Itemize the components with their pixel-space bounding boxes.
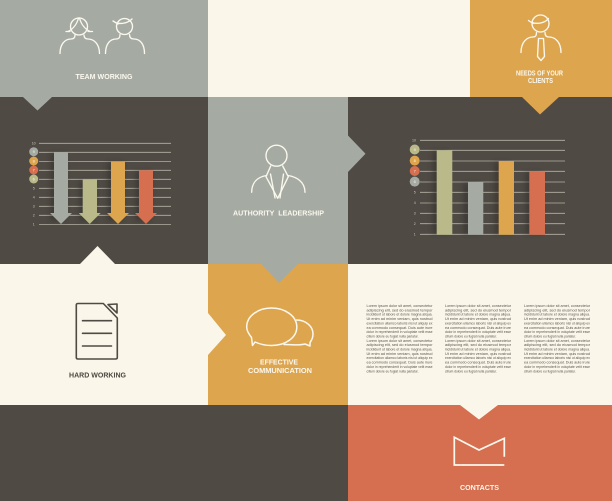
icon: document [76,304,117,359]
panel: right chart background [348,97,612,264]
bar chart: arrows: 3 [33,204,35,208]
arrow: clients pointer [522,97,559,114]
text block: column 3: Lorem ipsum dolor sit amet, consectetur [524,304,591,308]
bar chart: columns [410,138,565,236]
text block: column 1 [366,304,433,373]
text block: column 1: adipiscing elit, sed do eiusmod tempor [366,308,433,312]
panel: effective communication [208,264,348,405]
text block: column 3: dolor in reprehenderit in voluptate velit esse [524,365,590,369]
text block: column 2: cillum dolore eu fugiat nulla pariatur. [445,334,497,338]
text block: column 1: ea commodo consequat. Duis aute irure [366,361,432,365]
text block: column 2: adipiscing elit, sed do eiusmod tempor [445,308,512,312]
arrow: authority right pointer [348,136,366,172]
text block: column 2: adipiscing elit, sed do eiusmod tempor [445,343,512,347]
arrow: hard working up pointer [80,246,115,264]
text block: column 2: dolor in reprehenderit in voluptate velit esse [445,365,511,369]
text block: column 1: cillum dolore eu fugiat nulla pariatur. [366,334,418,338]
heading: needs of your clients [516,70,563,85]
text block: column 2: Ut enim ad minim veniam, quis nostrud [445,352,511,356]
heading: needs of your clients: NEEDS OF YOUR [516,70,563,78]
panel: authority leadership [208,97,348,264]
arrow: authority down pointer [261,264,298,283]
text block: column 1: exercitation ullamco laboris nisi ut aliquip ex [366,321,433,325]
bar chart: columns: 10 [412,138,416,142]
text block: column 1: adipiscing elit, sed do eiusmod tempor [366,343,433,347]
text block: column 3: adipiscing elit, sed do eiusmod tempor [524,308,591,312]
icon: speech bubbles [247,308,313,346]
bar chart: arrows: 1 [33,223,35,227]
text block: column 3: incididunt ut labore et dolore magna aliqua. [524,348,590,352]
heading: needs of your clients: CLIENTS [528,78,553,85]
text block: column 2: exercitation ullamco laboris nisi ut aliquip ex [445,321,511,325]
arrow: communication notch [208,313,226,355]
text block: column 3: incididunt ut labore et dolore magna aliqua. [524,313,590,317]
heading: contacts: CONTACTS [460,485,499,492]
icon: envelope [454,437,504,465]
panel: contacts [348,405,612,501]
bar chart: columns: 5 [414,190,416,194]
icon: client with tie [521,15,561,60]
text block: column 3: cillum dolore eu fugiat nulla pariatur. [524,369,576,373]
bar chart: columns: 9 [414,147,417,152]
bar chart: arrows: 6 [33,176,36,181]
bar chart: arrows: 2 [33,214,35,218]
text block: column 3: Ut enim ad minim veniam, quis nostrud [524,352,590,356]
text block: column 3 [524,304,591,373]
bar chart: columns: 8 [414,158,417,163]
text block: column 1: Lorem ipsum dolor sit amet, consectetur [366,339,433,343]
text block: column 2: Lorem ipsum dolor sit amet, consectetur [445,339,512,343]
text block: column 3: exercitation ullamco laboris nisi ut aliquip ex [524,356,590,360]
text block: column 1: incididunt ut labore et dolore magna aliqua. [366,313,432,317]
text block: column 2: incididunt ut labore et dolore magna aliqua. [445,348,511,352]
text block: column 2: Lorem ipsum dolor sit amet, consectetur [445,304,512,308]
text block: column 2: ea commodo consequat. Duis aute irure [445,326,511,330]
bar chart: columns: 1 [414,232,416,236]
text block: column 3: ea commodo consequat. Duis aute irure [524,326,590,330]
bar chart: columns: 3 [414,212,416,216]
bar chart: arrows: 7 [33,167,36,172]
text block: column 1: incididunt ut labore et dolore magna aliqua. [366,348,432,352]
bar chart: arrows: 10 [32,142,36,146]
text block: column 3: Lorem ipsum dolor sit amet, consectetur [524,339,591,343]
text block: column 3: dolor in reprehenderit in voluptate velit esse [524,330,590,334]
text block: column 1: Ut enim ad minim veniam, quis nostrud [366,352,432,356]
text block: column 1: ea commodo consequat. Duis aute irure [366,326,432,330]
bar chart: columns: 2 [414,222,416,226]
text block: column 2: incididunt ut labore et dolore magna aliqua. [445,313,511,317]
bar chart: arrows: 8 [33,158,36,163]
text block: column 2: ea commodo consequat. Duis aute irure [445,361,511,365]
bar chart: columns: 4 [414,201,416,205]
text block: column 2: exercitation ullamco laboris nisi ut aliquip ex [445,356,511,360]
panel: team working [0,0,208,97]
text block: column 3: ea commodo consequat. Duis aute irure [524,361,590,365]
icon: authority person [252,145,305,198]
bar chart: columns: 7 [414,168,417,173]
text block: column 3: cillum dolore eu fugiat nulla pariatur. [524,334,576,338]
arrow: contacts pointer [460,405,498,420]
heading: hard working: HARD WORKING [69,372,127,379]
text block: column 1: cillum dolore eu fugiat nulla pariatur. [366,369,418,373]
bar chart: arrows [29,142,171,227]
heading: effective communication: EFFECTIVE [260,359,298,366]
heading: authority leadership: AUTHORITY LEADERSHIP [233,210,324,218]
icon: team [60,18,144,54]
text block: column 2 [445,304,512,373]
bar chart: columns: 6 [414,179,417,184]
text block: column 1: dolor in reprehenderit in voluptate velit esse [366,365,432,369]
text block: column 2: cillum dolore eu fugiat nulla pariatur. [445,369,497,373]
heading: effective communication: COMMUNICATION [248,368,312,375]
heading: team working: TEAM WORKING [76,74,133,81]
text block: column 2: Ut enim ad minim veniam, quis nostrud [445,317,511,321]
panel: needs of your clients [470,0,612,97]
text block: column 3: Ut enim ad minim veniam, quis nostrud [524,317,590,321]
text block: column 3: adipiscing elit, sed do eiusmod tempor [524,343,591,347]
arrow: team working pointer [23,97,52,110]
bar chart: arrows: 5 [33,186,35,190]
panel: left chart background [0,97,208,264]
text block: column 3: exercitation ullamco laboris nisi ut aliquip ex [524,321,590,325]
text block: column 1: Ut enim ad minim veniam, quis nostrud [366,317,432,321]
bar chart: arrows: 9 [33,149,36,154]
text block: column 1: Lorem ipsum dolor sit amet, consectetur [366,304,433,308]
panel: bottom left dark [0,405,348,501]
text block: column 2: dolor in reprehenderit in voluptate velit esse [445,330,511,334]
text block: column 1: dolor in reprehenderit in voluptate velit esse [366,330,432,334]
text block: column 1: exercitation ullamco laboris nisi ut aliquip ex [366,356,433,360]
bar chart: arrows: 4 [33,196,35,200]
heading: effective communication [248,359,312,375]
